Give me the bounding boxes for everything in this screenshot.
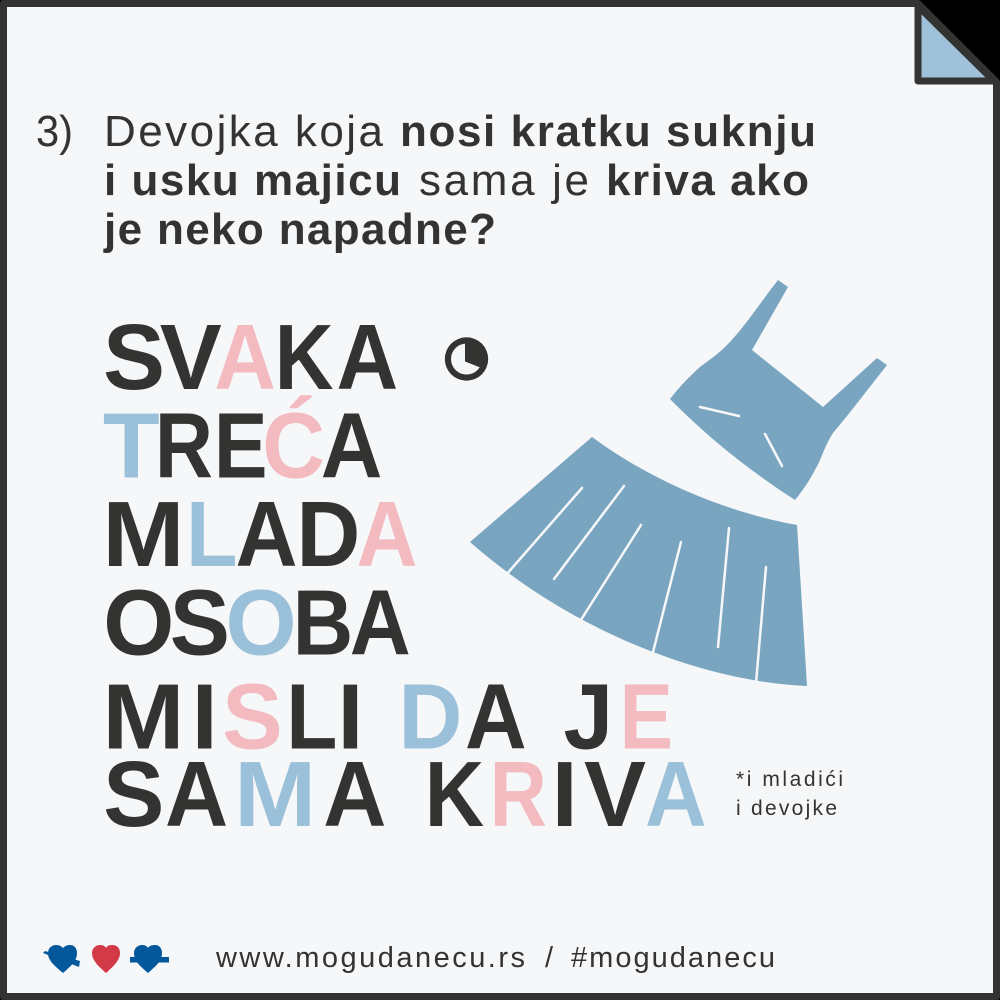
line: TREĆA: A [321, 393, 382, 497]
question text: sama je [419, 156, 589, 205]
line: SAMA KRIVA: A [323, 743, 386, 847]
line: TREĆA: Ć [262, 394, 325, 498]
line: OSOBA [103, 570, 411, 675]
line: SVAKA: A [336, 305, 398, 409]
line: OSOBA: S [170, 571, 230, 675]
line: SAMA KRIVA: R [490, 743, 547, 846]
footer link and hashtag: #mogudanecu [571, 942, 775, 974]
line: SVAKA: S [103, 305, 165, 409]
illustration: crop top [670, 280, 887, 500]
question text: Devojka koja [104, 107, 384, 156]
line: SVAKA: K [275, 305, 334, 409]
question text [103, 107, 816, 254]
line: MISLI DA JE: D [398, 666, 462, 769]
icon: blue heart with arrow [130, 945, 169, 973]
line: MISLI DA JE: J [564, 665, 613, 769]
line: MISLI DA JE: E [620, 665, 673, 769]
line: MISLI DA JE: A [465, 664, 527, 768]
footer link and hashtag: / [545, 942, 554, 974]
line: MISLI DA JE: S [222, 666, 283, 769]
icon: blue heart with arrow [43, 945, 80, 973]
line: MLADA: M [102, 483, 185, 586]
line: TREĆA: R [155, 394, 213, 498]
line: MLADA [102, 482, 417, 587]
line: SAMA KRIVA: A [165, 743, 228, 847]
line: MISLI DA JE [102, 664, 673, 769]
question text: kriva ako [606, 156, 809, 205]
line: MLADA: L [186, 482, 237, 586]
line: MISLI DA JE: M [102, 665, 185, 769]
line: SAMA KRIVA: I [552, 742, 578, 846]
line: SAMA KRIVA: K [425, 742, 484, 846]
question number: 3) [36, 107, 73, 156]
icon: one third pie [445, 337, 488, 381]
line: OSOBA: B [293, 570, 353, 674]
question text: i usku majicu [104, 156, 401, 205]
question text: nosi kratku suknju [400, 107, 816, 156]
line: TREĆA: E [214, 394, 267, 498]
line: SAMA KRIVA: M [234, 743, 316, 846]
line: MLADA: A [236, 482, 297, 586]
question text: je neko napadne? [103, 205, 496, 254]
line: OSOBA: A [350, 571, 411, 674]
folded corner [918, 6, 994, 81]
line: OSOBA: O [226, 571, 297, 674]
line: SAMA KRIVA: A [645, 742, 707, 846]
line: MLADA: A [356, 482, 417, 586]
headline statistic [102, 305, 707, 847]
footer logo hearts [43, 945, 169, 973]
line: MISLI DA JE: L [286, 665, 337, 769]
line: SAMA KRIVA: V [584, 742, 646, 846]
footnote: i devojke [736, 797, 837, 820]
line: MISLI DA JE: I [192, 665, 218, 769]
line: OSOBA: O [103, 571, 174, 674]
footnote [736, 768, 843, 820]
line: TREĆA [103, 393, 382, 498]
line: SAMA KRIVA [103, 741, 707, 847]
footer link and hashtag: www.mogudanecu.rs [215, 942, 525, 974]
line: SVAKA [103, 305, 398, 409]
illustration: skirt [470, 437, 807, 686]
footnote: *i mladići [736, 768, 843, 791]
line: SAMA KRIVA: S [103, 741, 164, 846]
line: TREĆA: T [103, 394, 160, 498]
footer link and hashtag [215, 942, 775, 974]
line: MISLI DA JE: I [338, 665, 363, 769]
line: MLADA: D [296, 483, 360, 587]
line: SVAKA: V [160, 305, 222, 409]
line: SVAKA: A [214, 305, 276, 409]
icon: red heart [92, 945, 120, 973]
